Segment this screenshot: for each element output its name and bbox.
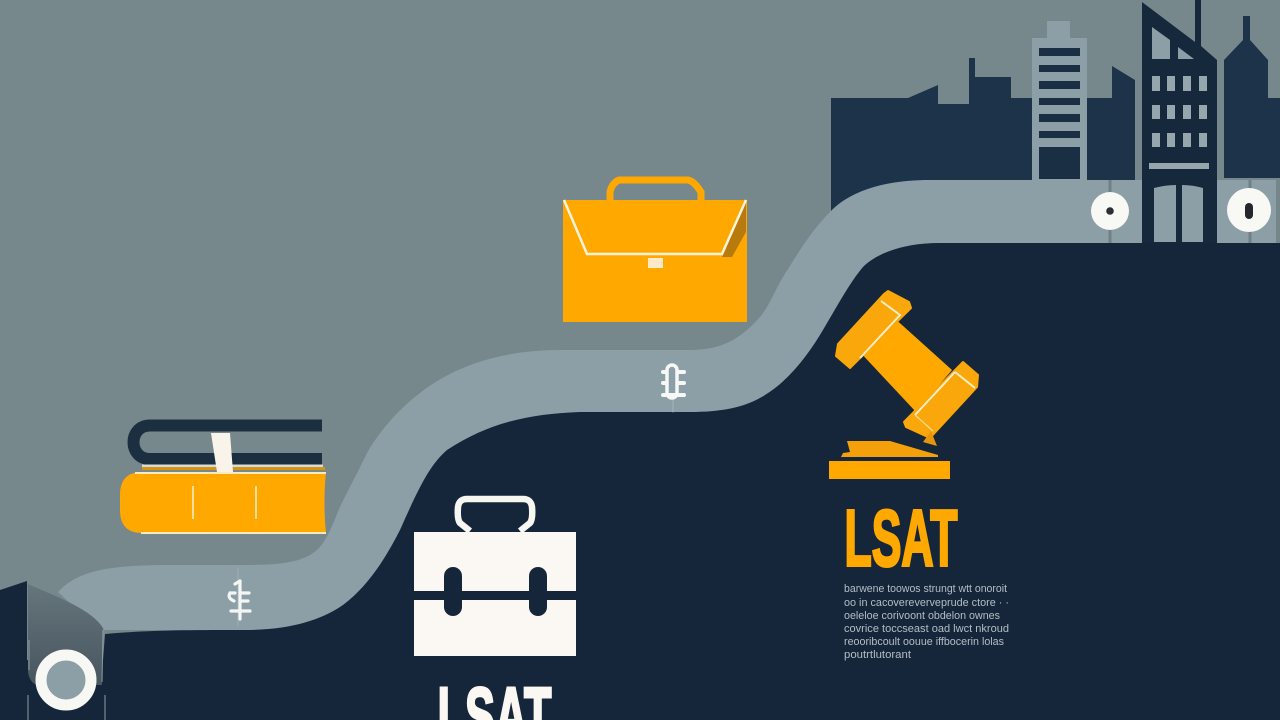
skyline: left block xyxy=(831,58,1135,215)
icon: orange briefcase xyxy=(563,180,747,322)
road marker: white dot 1 xyxy=(1091,180,1129,243)
text block: description: barwene toowos strungt wtt onoroit xyxy=(844,583,1007,595)
road start scroll xyxy=(28,584,105,720)
icon: road sign 2 xyxy=(663,365,684,412)
text block: description: poutrtlutorant xyxy=(844,649,911,661)
dark tall building xyxy=(1142,0,1217,243)
icon: road sign 1 xyxy=(229,568,250,625)
dark ground xyxy=(103,243,1280,720)
road marker: white dot 2 xyxy=(1227,180,1271,243)
text block: description: oo in cacovereverveprude ctore · · xyxy=(844,597,1009,609)
heading: orange LSAT: LSAT xyxy=(844,494,958,582)
icon: orange gavel xyxy=(829,291,978,479)
icon: white briefcase xyxy=(414,499,576,656)
start ring xyxy=(41,655,91,705)
left dark wedge xyxy=(0,581,106,720)
right edge strip xyxy=(1276,178,1280,243)
skyline: right building xyxy=(1224,16,1280,178)
text block: description: oeleloe corivoont obdelon ownes xyxy=(844,610,1000,622)
icon: orange book xyxy=(120,426,326,533)
skyline: pale tower xyxy=(1032,21,1087,180)
text block: description: covrice toccseast oad lwct nkroud xyxy=(844,623,1009,635)
road xyxy=(58,180,1280,630)
text block: description xyxy=(844,583,1009,661)
text block: description: reooribcoult oouue iffbocerin lolas xyxy=(844,636,1004,648)
